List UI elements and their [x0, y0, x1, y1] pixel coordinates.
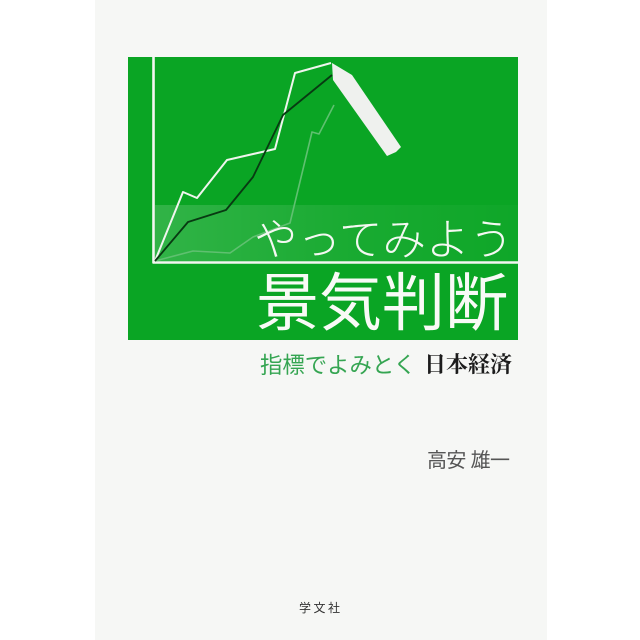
black line series [155, 75, 332, 261]
chart: indicator line graph [154, 57, 518, 262]
subtitle: 指標でよみとく [260, 353, 416, 378]
subtitle [260, 352, 512, 378]
faint line series [155, 105, 334, 261]
heading: keiki handan: 景気判断 [256, 269, 508, 339]
panel: green cover block [128, 57, 518, 340]
author name: 高安 雄一 [427, 449, 510, 472]
publisher: 学文社 [299, 600, 340, 615]
lighter band behind heading [155, 205, 518, 261]
book cover page [95, 0, 547, 640]
white line series [155, 63, 331, 261]
subtitle: 日本経済 [424, 352, 512, 377]
chart axes [154, 57, 518, 262]
icon: chalk [332, 63, 401, 156]
heading: yatte miyou: やってみよう [254, 217, 513, 265]
